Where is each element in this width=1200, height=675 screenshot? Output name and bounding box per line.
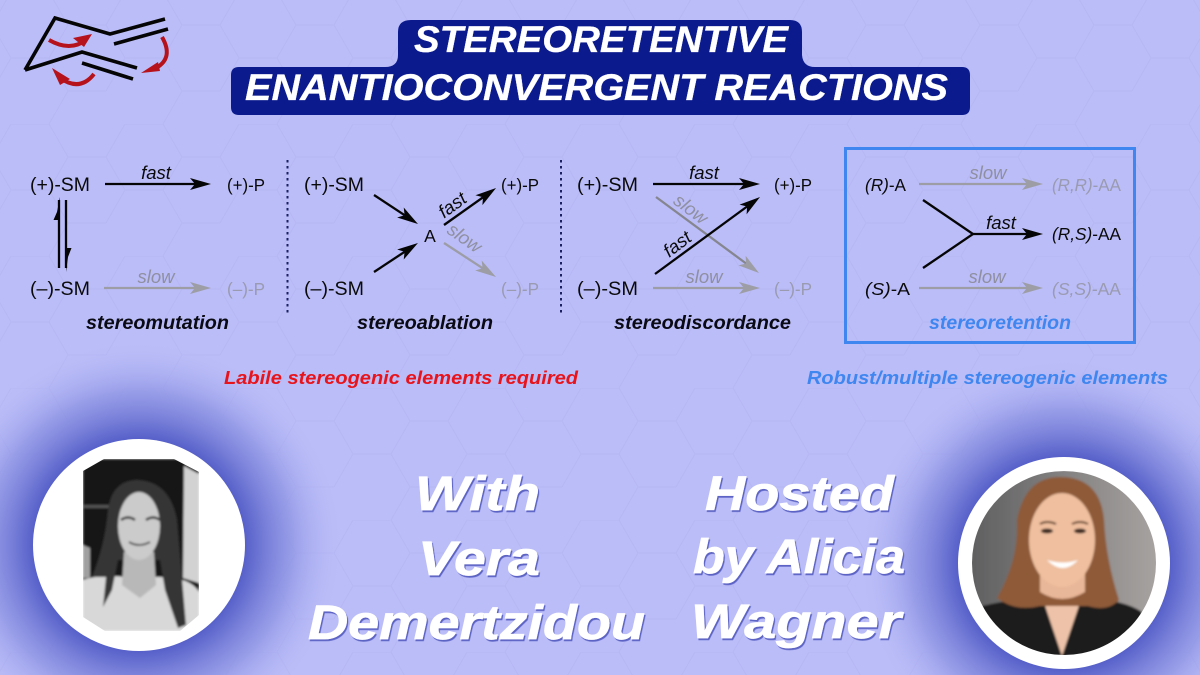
host name: Hosted bbox=[705, 468, 896, 521]
glow behind guest portrait bbox=[0, 340, 344, 675]
host name: Wagner bbox=[691, 596, 904, 649]
panel: stereoablation: (–)-SM bbox=[304, 278, 364, 300]
panel: stereoretention: fast bbox=[986, 212, 1017, 233]
icon: Cope rearrangement molecule bbox=[25, 18, 168, 85]
panel: stereodiscordance: (–)-P bbox=[774, 279, 812, 299]
panel: stereoretention: (R,S)-AA bbox=[1052, 224, 1121, 244]
panel: stereomutation: (–)-P bbox=[227, 279, 265, 299]
panel: stereodiscordance: (+)-SM bbox=[577, 174, 638, 196]
callout: robust: Robust/multiple stereogenic elements bbox=[807, 367, 1168, 388]
panel: stereoablation bbox=[304, 174, 539, 334]
panel: stereomutation: stereomutation bbox=[86, 313, 229, 334]
panel: stereomutation: (+)-SM bbox=[30, 174, 90, 196]
panel: stereodiscordance: (+)-P bbox=[774, 175, 812, 195]
divider: dotted left bbox=[286, 160, 288, 313]
panel: stereoablation: slow bbox=[444, 218, 487, 258]
panel: stereoablation: (+)-SM bbox=[304, 174, 364, 196]
guest name bbox=[308, 468, 645, 650]
glow behind host portrait bbox=[859, 358, 1200, 675]
host name: by Alicia bbox=[693, 531, 905, 584]
callout: labile: Labile stereogenic elements required bbox=[224, 367, 579, 388]
title banner: ENANTIOCONVERGENT REACTIONS bbox=[245, 67, 948, 108]
panel: stereodiscordance: fast bbox=[689, 162, 720, 183]
guest name: With bbox=[415, 468, 540, 521]
panel: stereoretention bbox=[846, 148, 1134, 342]
portrait: Alicia Wagner bbox=[958, 457, 1170, 669]
panel: stereoretention: (R,R)-AA bbox=[1052, 175, 1121, 195]
title banner: STEREORETENTIVE bbox=[414, 19, 789, 60]
panel: stereoretention: (S,S)-AA bbox=[1052, 279, 1121, 299]
host name bbox=[691, 468, 905, 649]
panel: stereomutation: (+)-P bbox=[227, 175, 265, 195]
panel: stereodiscordance: slow bbox=[670, 189, 713, 229]
panel: stereomutation bbox=[30, 162, 265, 334]
panel: stereoablation: stereoablation bbox=[357, 313, 493, 334]
guest name: Vera bbox=[418, 533, 540, 586]
panel: stereoablation: A bbox=[424, 226, 436, 246]
panel: stereoablation: (+)-P bbox=[501, 175, 539, 195]
panel: stereomutation: fast bbox=[141, 162, 172, 183]
panel: stereodiscordance: stereodiscordance bbox=[614, 313, 791, 334]
panel: stereoretention: slow bbox=[968, 266, 1007, 287]
panel: stereomutation: (–)-SM bbox=[30, 278, 90, 300]
panel: stereoablation: (–)-P bbox=[501, 279, 539, 299]
panel: stereomutation: slow bbox=[137, 266, 176, 287]
portrait: Vera Demertzidou bbox=[33, 439, 245, 651]
divider: dotted right bbox=[560, 160, 562, 313]
panel: stereodiscordance bbox=[577, 162, 812, 334]
panel: stereoablation: fast bbox=[434, 187, 471, 222]
panel: stereodiscordance: (–)-SM bbox=[577, 278, 638, 300]
panel: stereodiscordance: fast bbox=[659, 226, 696, 261]
panel: stereoretention: stereoretention bbox=[929, 313, 1071, 334]
panel: stereoretention: (S)-A bbox=[865, 279, 910, 299]
panel: stereodiscordance: slow bbox=[685, 266, 724, 287]
title banner bbox=[231, 19, 970, 115]
panel: stereoretention: slow bbox=[969, 162, 1008, 183]
panel: stereoretention: (R)-A bbox=[865, 175, 906, 195]
guest name: Demertzidou bbox=[308, 597, 645, 650]
